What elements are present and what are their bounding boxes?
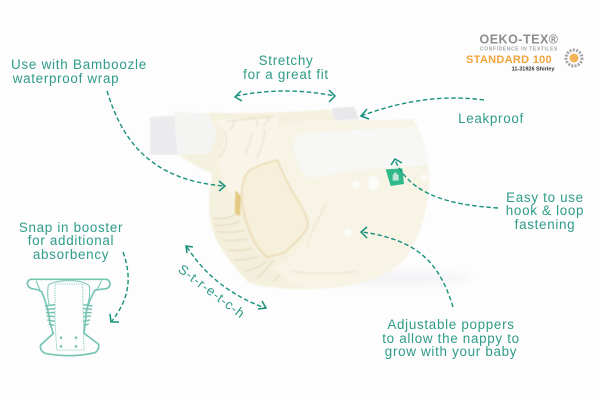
title: Use with Bamboozle: waterproof wrap bbox=[12, 71, 119, 86]
title: Use with Bamboozle bbox=[11, 57, 147, 86]
label: Adjustable poppers: grow with your baby bbox=[385, 344, 517, 359]
back velcro tab bbox=[150, 115, 178, 155]
label: Stretchy: Stretchy bbox=[259, 53, 313, 68]
label: Stretchy bbox=[243, 53, 329, 82]
label: Easy to use: Easy to use bbox=[506, 190, 584, 205]
label: Snap in booster: Snap in booster bbox=[19, 220, 123, 235]
OEKO-TEX logo: 11-31926 Shirley bbox=[512, 66, 555, 72]
label: Easy to use: fastening bbox=[515, 217, 575, 232]
label: Adjustable poppers: Adjustable poppers bbox=[387, 317, 515, 332]
OEKO-TEX logo bbox=[466, 32, 582, 72]
arrow: booster bbox=[110, 252, 128, 322]
arrow: poppers bbox=[361, 227, 453, 307]
arrow: leakproof bbox=[361, 98, 484, 119]
arrow: stretchy bbox=[235, 90, 335, 102]
back velcro patch bbox=[174, 112, 217, 155]
arrow: hook and loop bbox=[391, 159, 498, 208]
ground shadow bbox=[310, 271, 470, 286]
gold inner shadow bbox=[235, 190, 241, 216]
label: Easy to use bbox=[506, 190, 584, 232]
nappy silhouette bbox=[178, 109, 429, 289]
label: Snap in booster: for additional bbox=[28, 233, 114, 248]
label: S-t-r-e-t-c-h: S-t-r-e-t-c-h bbox=[175, 261, 248, 321]
front panel shading bbox=[292, 203, 357, 273]
label: Adjustable poppers: to allow the nappy to bbox=[382, 331, 520, 346]
back right strip bbox=[332, 107, 359, 121]
OEKO-TEX logo: CONFIDENCE IN TEXTILES bbox=[480, 46, 558, 52]
label: Snap in booster bbox=[19, 220, 123, 262]
OEKO-TEX logo: STANDARD 100 bbox=[466, 54, 552, 66]
poppers bbox=[344, 174, 427, 237]
title: Use with Bamboozle: Use with Bamboozle bbox=[11, 57, 147, 72]
front panel bbox=[270, 120, 429, 287]
arrow: stretch bbox=[186, 246, 266, 309]
green brand tag bbox=[386, 168, 404, 186]
label: Stretchy: for a great fit bbox=[243, 67, 329, 82]
icon: nappy outline bbox=[27, 279, 110, 356]
nappy photograph bbox=[150, 107, 470, 289]
booster pad bbox=[242, 160, 308, 257]
front velcro strip bbox=[293, 127, 428, 178]
OEKO-TEX logo: OEKO-TEX® bbox=[480, 32, 559, 46]
label: Snap in booster: absorbency bbox=[33, 247, 109, 262]
label: Adjustable poppers bbox=[382, 317, 520, 359]
arrow: wrap bbox=[107, 91, 225, 191]
gathered leg elastic bbox=[212, 213, 307, 282]
icon: oeko flower bbox=[566, 50, 582, 66]
inner gathered fabric bbox=[215, 117, 290, 203]
label: Easy to use: hook & loop bbox=[506, 203, 584, 218]
label: Leakproof: Leakproof bbox=[458, 111, 524, 126]
